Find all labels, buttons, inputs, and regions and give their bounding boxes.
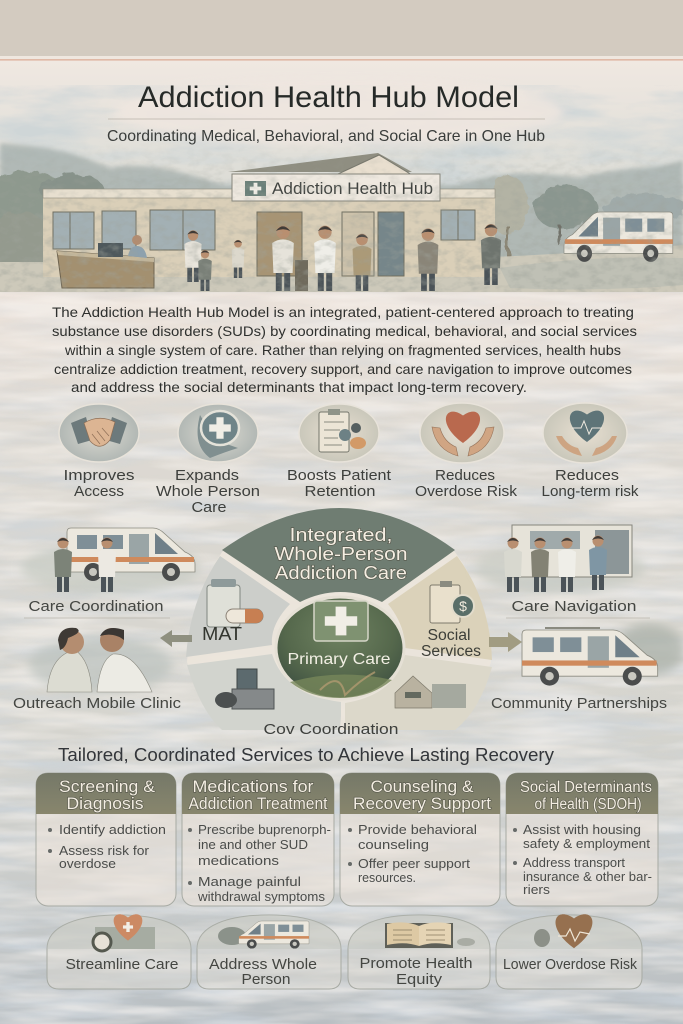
- label: Reduces: [435, 468, 495, 484]
- scene: community partnerships: [491, 618, 683, 712]
- ambulance: [564, 212, 673, 262]
- sector: social services: [388, 556, 492, 660]
- top blank band: [0, 0, 683, 56]
- icon: open book: [385, 922, 475, 948]
- outcome card: lower overdose risk: [496, 914, 642, 989]
- card: medications for addiction treatment: withdrawal symptoms: [197, 889, 326, 904]
- sector: social services: $: [459, 598, 467, 614]
- paint grain: [0, 160, 683, 292]
- outcome card: promote health equity: Equity: [396, 972, 443, 988]
- benefit: improves access: [59, 404, 139, 500]
- outcome card: streamline care: [47, 914, 191, 989]
- card: counseling and recovery support: Counseling &: [370, 778, 474, 796]
- primary care hub: [276, 597, 404, 699]
- intro paragraph: within a single system of care. Rather than relying on fragmented services, health hubs: [64, 342, 621, 358]
- road: [500, 257, 683, 289]
- title: Addiction Health Hub Model: [138, 81, 519, 114]
- two clinicians: [24, 618, 172, 693]
- section heading: Tailored, Coordinated Services to Achieve Lasting Recovery: [58, 744, 555, 765]
- sky: [0, 61, 683, 292]
- label: Improves: [64, 468, 134, 484]
- card: medications for addiction treatment: ine and other SUD: [198, 837, 308, 852]
- card: medications for addiction treatment: Prescribe buprenorph-: [198, 822, 331, 837]
- intro paragraph: The Addiction Health Hub Model is an integrated, patient-centered approach to treating: [52, 304, 634, 320]
- label: Expands: [175, 468, 239, 484]
- card: screening and diagnosis: Diagnosis: [66, 795, 144, 813]
- card: social determinants of health: Assist with housing: [523, 822, 641, 837]
- card: social determinants of health: safety & employment: [523, 836, 650, 851]
- label: Care Navigation: [512, 599, 636, 615]
- card: screening and diagnosis: Identify addiction: [59, 822, 166, 837]
- van with staff: [20, 528, 200, 594]
- sector: social services: Services: [421, 643, 481, 660]
- doors: [257, 212, 404, 276]
- card: medications for addiction treatment: Manage painful: [198, 874, 301, 889]
- people: [184, 224, 501, 291]
- card: medications for addiction treatment: Addiction Treatment: [188, 795, 328, 813]
- sector: community housing: [345, 655, 492, 730]
- outcome card: address whole person: Person: [242, 972, 290, 988]
- card: screening and diagnosis: [36, 773, 176, 906]
- windows: [53, 210, 475, 250]
- benefit: boosts patient retention: [287, 404, 391, 500]
- sector: social services: Social: [428, 627, 470, 644]
- sector: integrated whole-person care: Addiction Care: [275, 562, 407, 583]
- benefit: expands whole person care: Care: [192, 500, 226, 516]
- label: Community Partnerships: [491, 696, 667, 712]
- benefit: reduces overdose risk: [415, 403, 518, 500]
- arrow left: [160, 630, 192, 647]
- outcome card: address whole person: Address Whole: [209, 957, 317, 973]
- subtitle: Coordinating Medical, Behavioral, and Social Care in One Hub: [107, 128, 545, 145]
- intro paragraph: [52, 304, 637, 395]
- card: counseling and recovery support: Provide behavioral: [358, 822, 477, 837]
- benefit: expands whole person care: Whole Person: [156, 484, 260, 500]
- label: coordination: Cov Coordination: [264, 722, 398, 738]
- building: [43, 153, 495, 288]
- scene: outreach mobile clinic: [13, 618, 181, 712]
- card: social determinants of health: Address transport: [523, 855, 625, 870]
- header rule: [0, 56, 683, 61]
- benefit: expands whole person care: [156, 404, 260, 516]
- card: screening and diagnosis: overdose: [59, 856, 116, 871]
- card: counseling and recovery support: counseling: [358, 837, 429, 852]
- outcome card: promote health equity: Promote Health: [360, 956, 472, 972]
- label: Boosts Patient: [287, 468, 391, 484]
- outcome card: streamline care: Streamline Care: [66, 957, 178, 973]
- outcome card: address whole person: [197, 915, 341, 989]
- icon: pulse heart: [534, 914, 592, 948]
- sector: MAT: MAT: [202, 624, 242, 644]
- outcome card: promote health equity: [348, 915, 490, 989]
- arrow right: [489, 632, 522, 652]
- card: social determinants of health: of Health (SDOH): [534, 796, 642, 813]
- mobile unit with staff: [475, 525, 645, 594]
- card: social determinants of health: insurance & other bar-: [523, 869, 652, 884]
- mobile clinic van: [506, 618, 683, 686]
- icon: heart in hands: [420, 403, 504, 463]
- sign: [232, 174, 440, 201]
- reception desk: [57, 235, 154, 288]
- trees: [0, 172, 683, 284]
- card: counseling and recovery support: Recovery Support: [353, 795, 491, 813]
- primary care hub: Primary Care: [288, 651, 391, 668]
- card: social determinants of health: riers: [523, 882, 551, 897]
- hub diagram: [160, 508, 522, 738]
- outcome card: lower overdose risk: Lower Overdose Risk: [503, 957, 638, 973]
- mountains: [0, 143, 683, 290]
- label: Care Coordination: [28, 599, 164, 615]
- benefit: improves access: Access: [74, 484, 124, 500]
- sign: Addiction Health Hub: [272, 179, 433, 198]
- ground: [0, 245, 683, 292]
- card: counseling and recovery support: resources.: [358, 870, 416, 885]
- sector: integrated whole-person care: Whole-Person: [274, 543, 408, 564]
- benefit: reduces overdose risk: Overdose Risk: [415, 484, 518, 500]
- benefit: boosts patient retention: Retention: [304, 484, 376, 500]
- icon: medical cross: [178, 404, 258, 462]
- diagram base: [187, 511, 491, 730]
- intro paragraph: centralize addiction treatment, recovery support, and care navigation to improve outcomes: [54, 361, 632, 377]
- scene: care navigation: [475, 525, 645, 615]
- icon: clipboard and pills: [299, 404, 379, 462]
- intro paragraph: and address the social determinants that impact long-term recovery.: [71, 379, 527, 395]
- intro paragraph: substance use disorders (SUDs) by coordinating medical, behavioral, and social services: [52, 323, 637, 339]
- card: counseling and recovery support: [340, 773, 500, 906]
- card: social determinants of health: Social Determinants: [520, 779, 652, 796]
- icon: stethoscope and heart: [93, 914, 155, 951]
- scene: care coordination: [20, 528, 200, 615]
- benefit: reduces long-term risk: [542, 403, 639, 500]
- card: social determinants of health: [506, 773, 658, 906]
- card: counseling and recovery support: Offer peer support: [358, 856, 470, 871]
- card: screening and diagnosis: Assess risk for: [59, 843, 150, 858]
- benefit: reduces long-term risk: Long-term risk: [542, 484, 639, 500]
- card: medications for addiction treatment: [182, 773, 334, 906]
- icon: handshake: [59, 404, 139, 462]
- label: Reduces: [555, 468, 619, 484]
- sector: MAT: [186, 556, 290, 657]
- icon: pulse heart in hands: [543, 403, 627, 463]
- icon: mobile van: [218, 921, 309, 949]
- label: Outreach Mobile Clinic: [13, 696, 181, 712]
- card: screening and diagnosis: Screening &: [59, 778, 155, 796]
- sector: integrated whole-person care: [222, 508, 455, 602]
- sector: integrated whole-person care: Integrated,: [290, 524, 392, 545]
- card: medications for addiction treatment: medications: [198, 853, 280, 868]
- hero illustration: health hub building: [0, 85, 683, 292]
- card: medications for addiction treatment: Medications for: [192, 778, 314, 796]
- sector: care coordination computer: [187, 654, 341, 730]
